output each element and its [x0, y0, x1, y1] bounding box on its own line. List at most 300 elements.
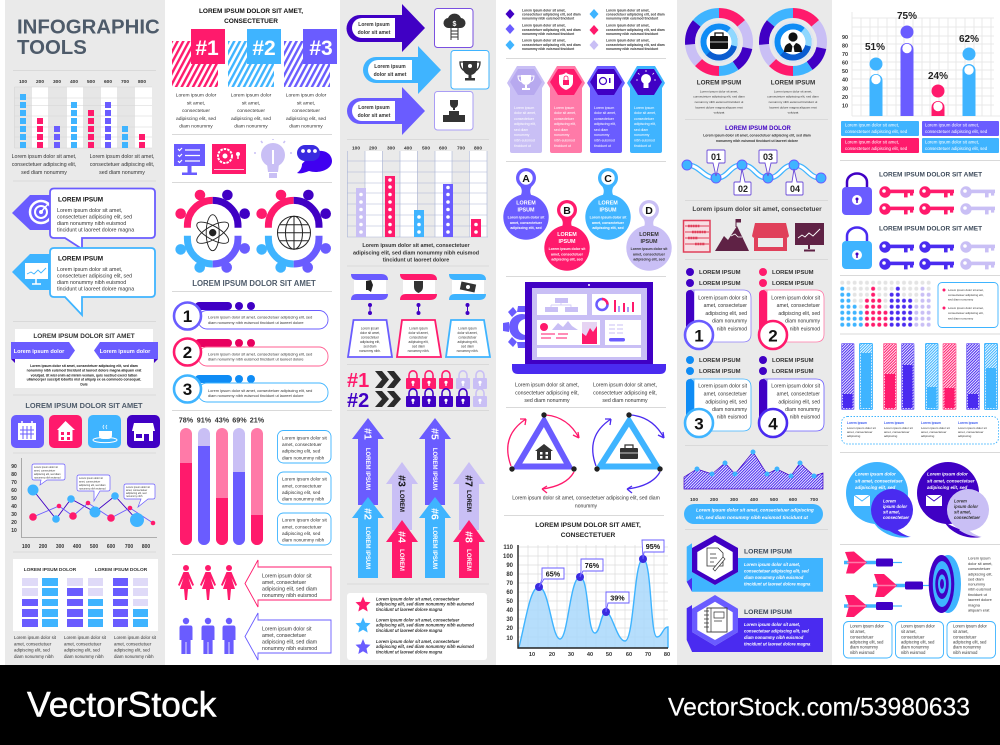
capsule chart notes: Lorem ipsum dolor sit	[282, 436, 328, 440]
panel: ribbon text box: LOREM IPSUM DOLOR SIT AMET	[33, 333, 135, 340]
step 1	[174, 302, 328, 330]
target note: magna	[968, 602, 981, 608]
hex pillar 2: shield: Lorem ipsum	[554, 106, 574, 110]
hex pillar 3: safe: Lorem ipsum	[594, 106, 614, 110]
lock and keys: purple	[842, 172, 995, 215]
title: TOOLS	[17, 37, 87, 59]
step 1: Lorem ipsum dolor sit amet, consectetuer adipiscing elit, sed	[208, 314, 312, 320]
area chart: 60	[626, 652, 632, 658]
capsule chart notes: amet, consectetuer	[282, 484, 322, 488]
line chart: 10	[11, 528, 17, 534]
triangle cycle: house	[508, 412, 579, 493]
hatched area chart: 100	[690, 497, 698, 503]
line chart: 80	[11, 472, 17, 478]
bar chart: square stacks: 800	[138, 79, 146, 85]
donut captions: LOREM IPSUM	[697, 80, 741, 86]
bullet list: nonummy nibh euismod tincidunt	[522, 16, 575, 20]
step 2: Lorem ipsum dolor sit amet, consectetuer adipiscing elit, sed	[208, 352, 312, 356]
bar chart: square stacks: 700	[121, 79, 129, 85]
trapezoid card 2: adipiscing elit,	[408, 340, 429, 344]
block table captions: diam nonummy nibh	[14, 654, 54, 659]
hex banner 1	[687, 535, 823, 592]
grid bar chart: 800	[474, 146, 482, 152]
step 1: diam nonummy nibh euismod tincidunt ut laoreet dolore	[208, 320, 304, 325]
trapezoid card 2: consectetuer	[409, 336, 429, 340]
heading: LOREM IPSUM DOLOR SIT AMET,	[199, 8, 303, 15]
callout: monitor	[12, 248, 155, 315]
feature card 3	[685, 356, 751, 437]
dashed legend: Lorem ipsum dolor sit	[884, 426, 913, 430]
bullet list: consectetuer adipiscing elit, sed diam	[522, 12, 581, 16]
laptop illustration	[503, 282, 666, 374]
footer: watermark bar: VectorStock.com/53980633	[668, 694, 970, 722]
upward arrows: #6	[428, 508, 440, 520]
feature card 3: Lorem ipsum dolor sit	[698, 384, 748, 390]
icons: men	[180, 618, 236, 654]
arrow 2: Lorem ipsum	[374, 64, 406, 70]
heading	[199, 8, 303, 25]
speech bubbles: blue: ipsum dolor	[883, 504, 907, 509]
rank captions: diam nonummy	[179, 124, 213, 130]
icons: women	[178, 565, 237, 600]
note cards	[844, 622, 996, 658]
speech bubbles: dark: Lorem	[954, 498, 967, 504]
feature card 1: adipiscing elit, sed	[705, 311, 747, 317]
trapezoid card 2: nonummy nibh.	[408, 349, 430, 353]
wave heading	[703, 126, 811, 143]
rank captions: sit amet,	[242, 100, 260, 106]
chart notes: consectetuer adipiscing elit, sed	[925, 146, 988, 151]
arrow callout: men: adipiscing elit, sed diam	[262, 640, 317, 646]
wave timeline: 02	[738, 184, 748, 194]
dashed legend: Lorem ipsum dolor sit	[847, 426, 876, 430]
area chart: 40	[506, 608, 514, 614]
target note: Lorem ipsum	[968, 556, 990, 560]
donut captions: volutpat	[788, 110, 799, 114]
feature card 3: diam nonummy	[712, 407, 747, 413]
area chart: 90	[506, 563, 514, 569]
laptop captions: sed diam nonummy	[524, 398, 570, 404]
block table captions: Lorem ipsum dolor sit	[64, 635, 107, 640]
hex pillar 1: trophy: dolor sit amet,	[514, 111, 536, 115]
callout: target: LOREM IPSUM	[58, 196, 103, 204]
chart notes: Lorem ipsum dolor sit amet,	[845, 140, 899, 144]
area chart: 10	[529, 652, 535, 658]
balloon D: Lorem ipsum dolor sit	[631, 247, 668, 251]
triangle caption: Lorem ipsum dolor sit amet, consectetuer adipiscing elit, sed diam	[512, 496, 660, 502]
step 3: diam nonummy nibh euismod tincidunt ut laoreet dolore	[208, 393, 304, 398]
hex pillar 2: shield: adipiscing elit,	[554, 122, 576, 126]
bullet list: consectetuer adipiscing elit, sed diam	[522, 28, 581, 32]
laptop captions: consectetuer adipiscing elit,	[593, 390, 657, 396]
target note: consectetuer	[968, 566, 991, 571]
feature card 2	[759, 268, 824, 349]
bullet list: Lorem ipsum dolor sit amet,	[522, 24, 566, 28]
capsule chart notes	[278, 430, 331, 545]
arrow 3	[347, 87, 425, 135]
donut captions: consectetuer adipiscing elit, sed diam	[693, 94, 745, 98]
arrow callout: women	[245, 560, 331, 607]
rank captions: consectetuer	[237, 108, 265, 114]
area chart: 60	[506, 590, 514, 596]
trapezoid card 2	[397, 274, 441, 357]
trapezoid card 2: dolor sit amet,	[408, 331, 429, 335]
wave timeline	[682, 150, 826, 195]
balloon A: LOREM	[516, 200, 536, 206]
rank row with locks	[347, 370, 487, 412]
panel: star notes: adipiscing elit, sed diam nonummy nibh euismod	[376, 644, 474, 649]
dashed legend: Lorem ipsum	[847, 421, 867, 425]
bullet list: consectetuer adipiscing elit, sed diam	[606, 12, 665, 16]
hex pillar 4: bulb: tincidunt ut	[634, 144, 651, 148]
capsule bar chart: 43%	[215, 416, 230, 424]
hex banner 2: diam nonummy nibh euismod	[744, 635, 804, 640]
line chart: 50	[11, 496, 17, 502]
trapezoid card 1: dolor sit amet,	[360, 331, 380, 335]
block table captions: adipiscing elit, sed	[114, 648, 150, 652]
hex banner 2: Lorem ipsum dolor sit amet,	[744, 622, 800, 627]
dashed legend: amet, consectetuer	[847, 430, 873, 434]
capsule bar chart: 91%	[197, 416, 212, 424]
lollipop bar chart: 20	[842, 95, 848, 101]
lollipop bar chart: 30	[842, 86, 848, 92]
chart captions: consectetuer adipiscing elit,	[12, 162, 76, 168]
note cards: Lorem ipsum dolor	[901, 624, 936, 628]
chart captions: consectetuer adipiscing elit,	[90, 162, 154, 168]
hatched area chart: 300	[730, 497, 738, 503]
note cards: adipiscing elit, sed	[901, 640, 935, 644]
laptop captions: consectetuer adipiscing elit,	[515, 390, 579, 396]
donut captions	[693, 80, 819, 114]
donut captions: Lorem ipsum dolor sit amet,	[774, 90, 812, 94]
hatched area chart: 400	[750, 497, 758, 503]
line chart: 60	[11, 488, 17, 494]
dashed legend: adipiscing	[847, 434, 861, 438]
hex pillar 4: bulb: consectetuer	[634, 117, 655, 121]
hex pillar 4: bulb: nibh euismod	[634, 138, 655, 142]
upward arrows: LOREM IPSUM	[431, 448, 437, 490]
capsule bar chart	[179, 416, 265, 545]
chart notes: Lorem ipsum dolor sit amet,	[925, 140, 979, 144]
feature card 2: LOREM IPSUM	[772, 281, 814, 287]
balloon D: amet, consectetuer	[633, 252, 666, 256]
arrow callout: women: nonummy nibh euismod	[262, 593, 317, 599]
dashed legend: amet, consectetuer	[958, 430, 984, 434]
area chart: 30	[568, 652, 574, 658]
trapezoid card 3: nonummy nibh.	[457, 349, 479, 353]
speech bubbles: dark: Lorem ipsum dolor	[927, 472, 968, 476]
hex banner 1: Lorem ipsum dolor sit amet,	[744, 562, 800, 567]
trapezoid card 1: consectetuer	[361, 336, 380, 340]
dot chart legend	[938, 282, 998, 328]
lollipop bar chart: 10	[842, 104, 848, 110]
bullet list: consectetuer adipiscing elit, sed diam	[522, 43, 581, 47]
target note: nonummy	[968, 582, 985, 586]
rank captions: adipiscing elit, sed	[231, 116, 271, 122]
area chart: 80	[664, 652, 670, 658]
line chart: adipiscing elit, sed	[126, 492, 147, 495]
area chart: 20	[549, 652, 555, 658]
speech bubbles: blue: sit amet, consectetuer	[855, 478, 903, 484]
panel: column 5	[677, 0, 832, 665]
panel: star notes: tincidunt ut laoreet dolore magna	[376, 607, 443, 612]
donut: briefcase	[690, 13, 748, 71]
capsule chart notes: adipiscing elit, sed	[282, 531, 321, 536]
callout: target: tincidunt ut laoreet dolore magna	[57, 228, 134, 234]
panel: ribbon text box: Lorem ipsum dolor	[100, 349, 151, 355]
wave heading: Lorem ipsum dolor sit amet, consectetuer adipiscing elit, sed diam	[703, 134, 811, 138]
line chart: amet, consectetuer	[126, 489, 147, 492]
hex banner 2: consectetuer adipiscing elit, sed	[744, 628, 809, 634]
hex pillar 1: trophy: sed diam	[514, 128, 528, 132]
dot matrix chart	[839, 280, 932, 328]
pill note: elit, sed diam nonummy nibh euismod tincidunt ut	[696, 515, 808, 520]
lollipop bar chart: 90	[842, 35, 848, 41]
panel: ribbon text box: nonummy nibh euismod tincidunt ut laoreet dolore magna aliquam erat	[27, 368, 142, 372]
footer: watermark bar	[0, 665, 1000, 745]
arrow callout: women: Lorem ipsum dolor sit	[262, 574, 312, 580]
balloon A: Lorem ipsum dolor sit	[508, 216, 545, 220]
hex banner 2: LOREM IPSUM	[744, 609, 792, 616]
bullet list: consectetuer adipiscing elit, sed diam	[606, 28, 665, 32]
heading: CONSECTETUER	[224, 18, 278, 25]
block table captions: amet, consectetuer	[114, 642, 152, 646]
line chart: 20	[11, 520, 17, 526]
hex pillar 3: safe	[587, 66, 625, 153]
dashed legend: adipiscing	[884, 434, 898, 438]
note cards: sit amet,	[901, 629, 916, 634]
note cards: adipiscing elit, sed	[850, 640, 884, 644]
upward arrows: #4	[395, 531, 407, 543]
lollipop bar chart: 75%	[897, 11, 917, 22]
title	[17, 16, 160, 59]
line chart: 40	[11, 504, 17, 510]
rank captions: sit amet,	[187, 100, 205, 106]
capsule chart notes: amet, consectetuer	[282, 524, 322, 530]
hex pillar 2: shield	[547, 66, 585, 153]
balloon B: LOREM	[557, 232, 577, 238]
arrow callout: women: adipiscing elit, sed diam	[262, 586, 317, 592]
panel: column 4	[503, 8, 672, 658]
wave timeline: 04	[790, 184, 800, 194]
hex pillar 1: trophy	[507, 66, 545, 153]
rank row with locks: #1	[347, 370, 369, 392]
callout: target	[12, 188, 155, 249]
donut: business man	[764, 13, 822, 71]
trapezoid card 1: adipiscing elit,	[360, 340, 380, 344]
triangle cycle: toolbox	[593, 412, 664, 493]
hex pillar 3: safe: nonummy	[594, 133, 610, 137]
bar chart: square stacks: 100	[19, 79, 27, 85]
upward arrows: #2	[361, 508, 373, 520]
line chart: Lorem ipsum dolor sit	[34, 466, 58, 469]
hex pillar 4: bulb: Lorem ipsum	[634, 106, 654, 110]
balloon D: LOREM	[639, 232, 659, 238]
feature card 4: LOREM IPSUM	[772, 369, 814, 375]
upward arrows: LOREM IPSUM	[364, 527, 370, 569]
icon: safe	[212, 144, 246, 174]
trapezoid card 3: Lorem ipsum	[458, 326, 477, 330]
area chart: 65%	[546, 570, 561, 578]
lollipop bar chart: 80	[842, 44, 848, 50]
area chart: 110	[503, 545, 514, 551]
icon tile: podium	[434, 92, 473, 130]
lollipop bar chart: 60	[842, 60, 848, 66]
target note: aliquam erat	[968, 608, 990, 612]
trapezoid card 3: dolor sit amet,	[457, 331, 478, 335]
rank captions: diam nonummy	[234, 124, 268, 130]
upward arrows: #8	[462, 531, 474, 543]
pill note	[684, 504, 823, 524]
hex pillar 1: trophy: adipiscing elit,	[514, 122, 536, 126]
lollipop bar chart: 24%	[928, 71, 948, 82]
step 2	[174, 338, 328, 366]
note cards: diam nonummy	[953, 644, 982, 650]
upward arrows: #3	[395, 475, 407, 487]
lollipop bar chart: 50	[842, 69, 848, 75]
trapezoid card 1: sed diam	[364, 344, 377, 348]
balloon A: amet, consectetuer	[510, 221, 543, 225]
feature card 3: adipiscing elit, sed	[705, 400, 747, 406]
rank captions: diam nonummy	[289, 124, 323, 130]
block table captions: adipiscing elit, sed	[14, 648, 50, 652]
hex pillar 1: trophy: nonummy	[514, 133, 530, 137]
line chart: 700	[125, 544, 133, 550]
hex pillar 1: trophy: consectetuer	[514, 117, 535, 121]
chart notes: consectetuer adipiscing elit, sed	[925, 129, 988, 134]
heading: LOREM IPSUM DOLOR SIT AMET	[192, 279, 316, 288]
line chart: amet, consectetuer	[34, 470, 55, 472]
hex pillar 4: bulb: adipiscing elit,	[634, 122, 656, 126]
hex pillar 3: safe: consectetuer	[594, 117, 615, 121]
speech bubbles: dark: adipiscing elit, sed	[927, 485, 968, 490]
block table captions: adipiscing elit, sed	[64, 648, 100, 652]
rank captions: adipiscing elit, sed	[286, 116, 326, 122]
donut captions: Lorem ipsum dolor sit amet,	[700, 90, 738, 94]
feature card 2: LOREM IPSUM	[772, 270, 814, 276]
dot chart legend: consectetuer adipiscing elit,	[948, 293, 984, 297]
panel: star notes: tincidunt ut laoreet dolore magna	[376, 628, 443, 633]
icon row	[11, 415, 160, 448]
line chart: Lorem ipsum dolor sit	[79, 477, 103, 480]
donut captions: volutpat	[714, 110, 725, 114]
panel: block table	[13, 559, 158, 631]
grid bar chart	[347, 146, 488, 237]
note cards: diam nonummy	[901, 644, 930, 650]
bullet list: nonummy nibh euismod tincidunt	[522, 47, 575, 51]
block table captions: Lorem ipsum dolor sit	[14, 635, 57, 640]
icon: light bulb	[254, 139, 292, 178]
feature card 1: LOREM IPSUM	[699, 270, 741, 276]
bullet list: Lorem ipsum dolor sit amet,	[606, 8, 650, 12]
note cards: Lorem ipsum dolor	[953, 624, 988, 628]
area chart: 100	[503, 554, 514, 560]
panel: star notes: adipiscing elit, sed diam nonummy nibh euismod	[376, 602, 474, 606]
icon tile: money cloud	[434, 8, 473, 48]
upward arrows: LOREM IPSUM	[364, 448, 370, 490]
capsule bar chart: 21%	[250, 416, 265, 424]
triangle caption: nonummy	[575, 504, 598, 510]
upward arrows: LOREM	[398, 490, 404, 512]
upward arrows: LOREM	[398, 549, 404, 571]
dot chart legend: sed diam nonummy	[948, 316, 974, 320]
target note	[968, 556, 992, 612]
panel: ribbon text box: ullamcorper suscipit lobortis nisl ut aliquip ex ea commodo consequat.	[27, 378, 141, 382]
step 3: Lorem ipsum dolor sit amet, consectetuer adipiscing elit, sed	[208, 388, 312, 393]
lock and keys: blue: LOREM IPSUM DOLOR SIT AMET	[879, 226, 982, 232]
balloon B	[544, 200, 590, 271]
note cards: consectetuer	[901, 634, 925, 640]
bullet list: Lorem ipsum dolor sit amet,	[606, 38, 650, 42]
hex pillar 2: shield: nonummy	[554, 133, 570, 137]
hex pillar 1: trophy: tincidunt ut	[514, 144, 531, 148]
grid bar chart: 500	[422, 146, 430, 152]
dashed legend: amet, consectetuer	[884, 430, 910, 434]
area chart: 30	[506, 617, 514, 623]
area chart: 80	[506, 572, 514, 578]
donut captions: LOREM IPSUM	[771, 80, 815, 86]
balloon C: Lorem ipsum dolor sit	[590, 216, 627, 220]
speech bubbles: blue: adipiscing elit, sed	[855, 485, 896, 490]
step 1: 1	[183, 307, 192, 326]
panel: ribbon text box: volutpat. Ut wisi enim ad minim veniam, quis nostrud exerci tation	[31, 374, 137, 378]
area chart: 10	[506, 636, 514, 642]
icon: mountain flag	[715, 219, 749, 251]
callout: monitor: diam nonummy nibh euismod	[57, 280, 126, 286]
line chart: 30	[11, 512, 17, 518]
bar chart: square stacks: 400	[70, 79, 78, 85]
hex banner 1: diam nonummy nibh euismod	[744, 575, 804, 580]
bullet list: consectetuer adipiscing elit, sed diam	[606, 43, 665, 47]
hex pillar 4: bulb: sed diam	[634, 128, 648, 132]
step 3: 3	[183, 380, 192, 399]
hex banner 1: LOREM IPSUM	[744, 548, 792, 556]
capsule chart notes: diam nonummy nibh	[282, 496, 325, 502]
hex banner 1: tincidunt ut laoreet dolore magna	[744, 582, 811, 586]
panel: ribbon text box: Duis	[80, 382, 88, 386]
callout: monitor: consectetuer adipiscing elit, sed	[57, 274, 132, 280]
bar chart: square stacks: 600	[104, 79, 112, 85]
note cards: adipiscing elit, sed	[953, 640, 987, 644]
dashed legend: adipiscing	[921, 434, 935, 438]
hex pillar 3: safe: sed diam	[594, 128, 608, 132]
line chart: nonummy nibh euismod	[79, 488, 106, 490]
panel: ribbon text box	[11, 329, 158, 388]
feature card 3: amet, consectetuer	[704, 392, 747, 398]
hex pillar 3: safe: dolor sit amet,	[594, 111, 616, 115]
rank captions: consectetuer	[292, 108, 320, 114]
balloon B: Lorem ipsum dolor sit	[549, 247, 586, 251]
capsule chart notes: Lorem ipsum dolor sit	[282, 518, 328, 522]
feature card 4	[759, 356, 824, 437]
arrow callout: men: nonummy nibh euismod	[262, 646, 317, 652]
bullet list: nonummy nibh euismod tincidunt	[606, 47, 659, 51]
area chart: 70	[506, 581, 514, 587]
note cards: sit amet,	[850, 629, 865, 634]
arrow callout: men: amet, consectetuer	[262, 633, 306, 639]
hex pillar 2: shield: tincidunt ut	[554, 144, 571, 148]
trapezoid card 2: sed diam	[412, 344, 425, 348]
callout: monitor: tincidunt ut laoreet dolore magna	[57, 286, 134, 292]
chart notes: consectetuer adipiscing elit, sed	[845, 129, 908, 134]
callout: monitor: Lorem ipsum dolor sit amet,	[57, 267, 122, 273]
trapezoid card 1: Lorem ipsum	[361, 326, 380, 330]
chart caption: tincidunt ut laoreet dolore	[383, 258, 449, 264]
rank captions: Lorem ipsum dolor	[231, 92, 272, 98]
trapezoid card 3: sed diam	[461, 344, 474, 348]
icon: chat bubble	[297, 145, 332, 173]
dashed legend: adipiscing	[958, 434, 972, 438]
